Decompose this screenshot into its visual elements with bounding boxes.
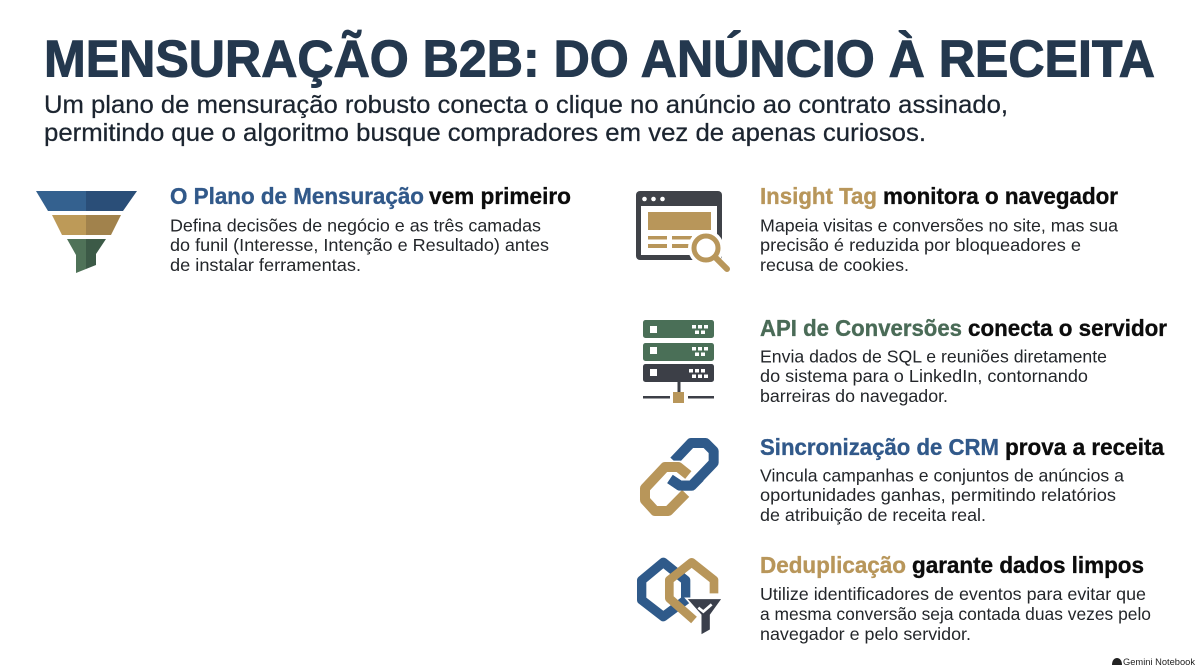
text: sincronização de crm: de atribuição de receita real. — [760, 505, 986, 525]
text: plano de mensuração: do funil (Interesse, Intenção e Resultado) antes — [170, 235, 549, 255]
heading: sincronização de crm: prova a receita — [1005, 434, 1164, 460]
heading: insight tag: Insight Tag — [760, 183, 877, 209]
panel: insight tag — [760, 183, 1118, 275]
text: insight tag: precisão é reduzida por bloqueadores e — [760, 235, 1081, 255]
heading: deduplicação — [760, 552, 1144, 578]
panel: sincronização de crm — [760, 434, 1164, 525]
panel: plano de mensuração — [170, 183, 571, 275]
text: api de conversões — [760, 346, 1107, 406]
heading: api de conversões: API de Conversões — [760, 315, 962, 341]
heading: deduplicação: Deduplicação — [760, 552, 906, 578]
text: insight tag — [760, 216, 1118, 275]
subtitle: Um plano de mensuração robusto conecta o clique no anúncio ao contrato assinado, — [44, 91, 1008, 119]
watermark: Gemini Notebook: Gemini Notebook — [1123, 657, 1195, 668]
icon: browser with magnifier — [636, 191, 727, 269]
heading: api de conversões: conecta o servidor — [968, 315, 1167, 341]
text: sincronização de crm: oportunidades ganhas, permitindo relatórios — [760, 485, 1116, 505]
heading: plano de mensuração: vem primeiro — [429, 183, 571, 209]
icon: chain link — [645, 443, 714, 511]
text: deduplicação: a mesma conversão seja contada duas vezes pelo — [760, 604, 1151, 624]
text: plano de mensuração: Defina decisões de negócio e as três camadas — [170, 216, 541, 236]
text: deduplicação — [760, 584, 1151, 644]
heading: insight tag — [760, 183, 1118, 209]
title: MENSURAÇÃO B2B: DO ANÚNCIO À RECEITA — [44, 30, 1155, 88]
subtitle: permitindo que o algoritmo busque compradores em vez de apenas curiosos. — [44, 119, 926, 147]
icon: funnel — [36, 191, 137, 273]
text: plano de mensuração — [170, 216, 549, 275]
text: deduplicação: navegador e pelo servidor. — [760, 624, 971, 644]
text: sincronização de crm — [760, 466, 1124, 525]
heading: deduplicação: garante dados limpos — [912, 552, 1144, 578]
panel: deduplicação — [760, 552, 1151, 644]
heading: plano de mensuração: O Plano de Mensuração — [170, 183, 424, 209]
panel: api de conversões — [760, 315, 1167, 406]
subtitle — [44, 91, 1008, 147]
heading: sincronização de crm — [760, 434, 1164, 460]
text: plano de mensuração: de instalar ferramentas. — [170, 255, 361, 275]
text: api de conversões: do sistema para o LinkedIn, contornando — [760, 366, 1088, 386]
text: deduplicação: Utilize identificadores de eventos para evitar que — [760, 584, 1146, 604]
heading: api de conversões — [760, 315, 1167, 341]
text: insight tag: recusa de cookies. — [760, 255, 909, 275]
heading: insight tag: monitora o navegador — [883, 183, 1118, 209]
text: api de conversões: barreiras do navegador. — [760, 386, 948, 406]
icon: overlapping hexagons with filter — [642, 562, 723, 636]
heading: sincronização de crm: Sincronização de CRM — [760, 434, 999, 460]
text: insight tag: Mapeia visitas e conversões no site, mas sua — [760, 216, 1118, 236]
heading: plano de mensuração — [170, 183, 571, 209]
text: sincronização de crm: Vincula campanhas e conjuntos de anúncios a — [760, 466, 1124, 486]
text: api de conversões: Envia dados de SQL e reuniões diretamente — [760, 346, 1107, 366]
icon: server stack — [643, 320, 714, 403]
